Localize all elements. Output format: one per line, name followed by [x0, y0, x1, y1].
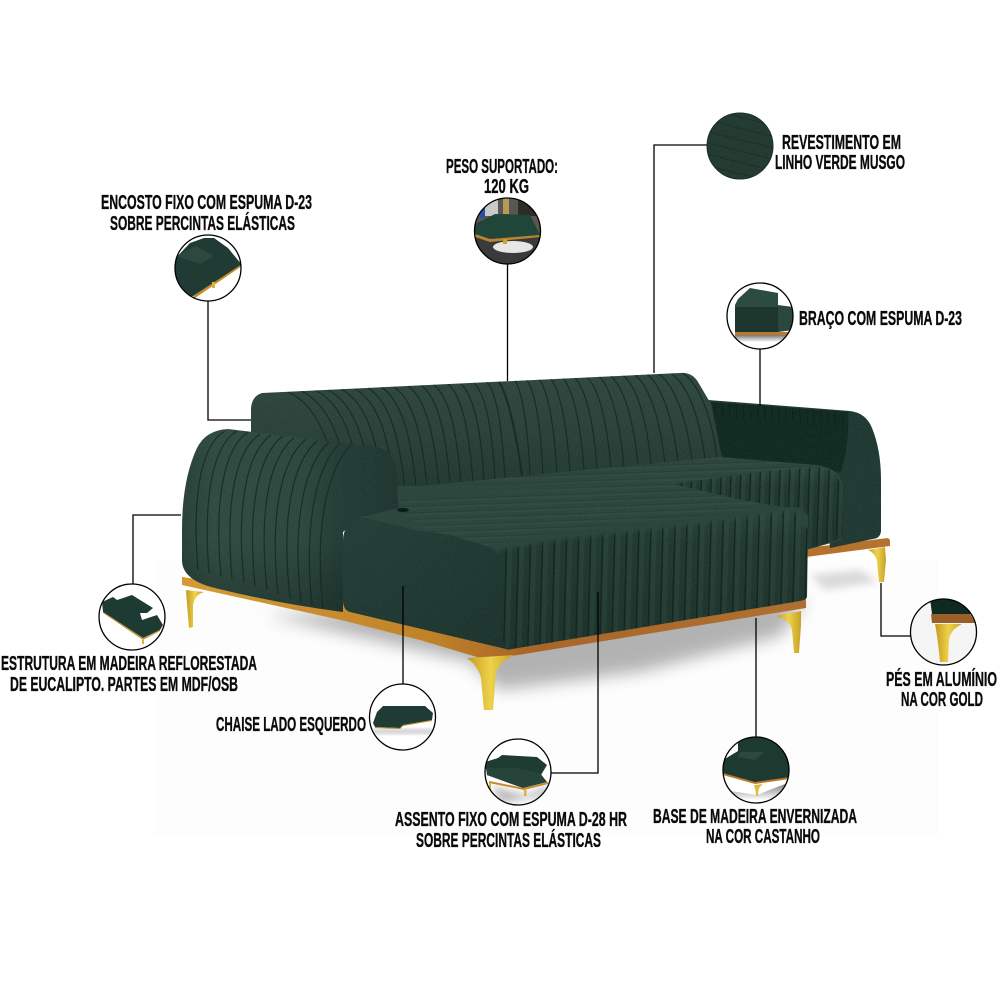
- text: percintas: SOBRE PERCINTAS ELÁSTICAS: [416, 829, 601, 852]
- icon: base thumbnail: [724, 738, 788, 798]
- text: castanho: NA COR CASTANHO: [706, 826, 820, 848]
- text: 120 kg: 120 KG: [484, 176, 529, 198]
- icon: leg thumbnail: [930, 600, 976, 664]
- callout: estrutura: [1, 515, 257, 696]
- chaise end and ribbed front: [343, 507, 808, 650]
- callout: pés: [881, 583, 997, 711]
- backrest ribs: [288, 373, 717, 490]
- icon: room thumbnail: [474, 198, 542, 266]
- icon ring: [723, 737, 789, 803]
- text: revestimento: REVESTIMENTO EM: [782, 132, 901, 154]
- text: peso: PESO SUPORTADO:: [446, 156, 558, 178]
- backrest: [251, 373, 722, 492]
- leader line: revestimento: [654, 145, 707, 373]
- text: estrutura: ESTRUTURA EM MADEIRA REFLORESTADA: [1, 653, 257, 675]
- icon ring: [707, 113, 773, 179]
- text: eucalipto: DE EUCALIPTO. PARTES EM MDF/OSB: [10, 674, 238, 696]
- seat: [398, 457, 843, 560]
- icon ring: [727, 283, 793, 349]
- text: assento: ASSENTO FIXO COM ESPUMA D-28 HR: [395, 809, 627, 831]
- callout: chaise: [216, 586, 436, 750]
- callout: braço: [727, 283, 962, 406]
- icon ring: [175, 235, 241, 301]
- callout: assento: [395, 592, 627, 852]
- icon ring: [474, 198, 540, 264]
- leader line: peso: [506, 264, 508, 381]
- icon: fabric swatch: [707, 113, 773, 179]
- left arm: [182, 429, 398, 612]
- callout: base: [653, 618, 857, 848]
- leader line: chaise: [402, 586, 404, 684]
- gold leg left: [186, 590, 204, 628]
- chaise top surface: [362, 482, 808, 575]
- icon ring: [910, 599, 976, 665]
- right arm: [708, 400, 881, 548]
- text: chaise: CHAISE LADO ESQUERDO: [216, 714, 366, 736]
- sofa illustration: [182, 373, 890, 710]
- main wooden base: [182, 577, 806, 660]
- leader line: braço: [759, 349, 761, 406]
- leader line: encosto: [208, 300, 251, 420]
- icon: backrest thumbnail: [176, 238, 240, 300]
- icon ring: [99, 584, 165, 650]
- leader line: base: [755, 618, 757, 737]
- callout: encosto: [101, 192, 312, 420]
- leader line: pés: [881, 583, 911, 636]
- arm ribs: [196, 431, 351, 608]
- text: linho: LINHO VERDE MUSGO: [775, 152, 905, 174]
- gold leg front: [467, 655, 514, 710]
- leader line: assento: [551, 592, 598, 773]
- icon ring: [485, 739, 551, 805]
- floor shadows: [265, 570, 878, 690]
- gold leg right: [776, 611, 801, 653]
- rear wooden base: [806, 538, 890, 557]
- icon: chaise thumbnail: [372, 706, 433, 736]
- callout: revestimento: [654, 113, 905, 373]
- text: encosto: ENCOSTO FIXO COM ESPUMA D-23: [101, 192, 312, 214]
- rear gold leg: [868, 547, 886, 582]
- callout: peso suportado: [446, 156, 558, 381]
- faint photo backdrop: [155, 560, 938, 836]
- text: base: BASE DE MADEIRA ENVERNIZADA: [653, 806, 857, 828]
- icon ring: [370, 684, 436, 750]
- leader line: estrutura: [133, 515, 181, 584]
- icon: arm thumbnail: [735, 288, 792, 342]
- icon: seat thumbnail: [486, 755, 548, 804]
- text: percintas: SOBRE PERCINTAS ELÁSTICAS: [110, 212, 295, 235]
- icon: structure thumbnail: [102, 595, 163, 644]
